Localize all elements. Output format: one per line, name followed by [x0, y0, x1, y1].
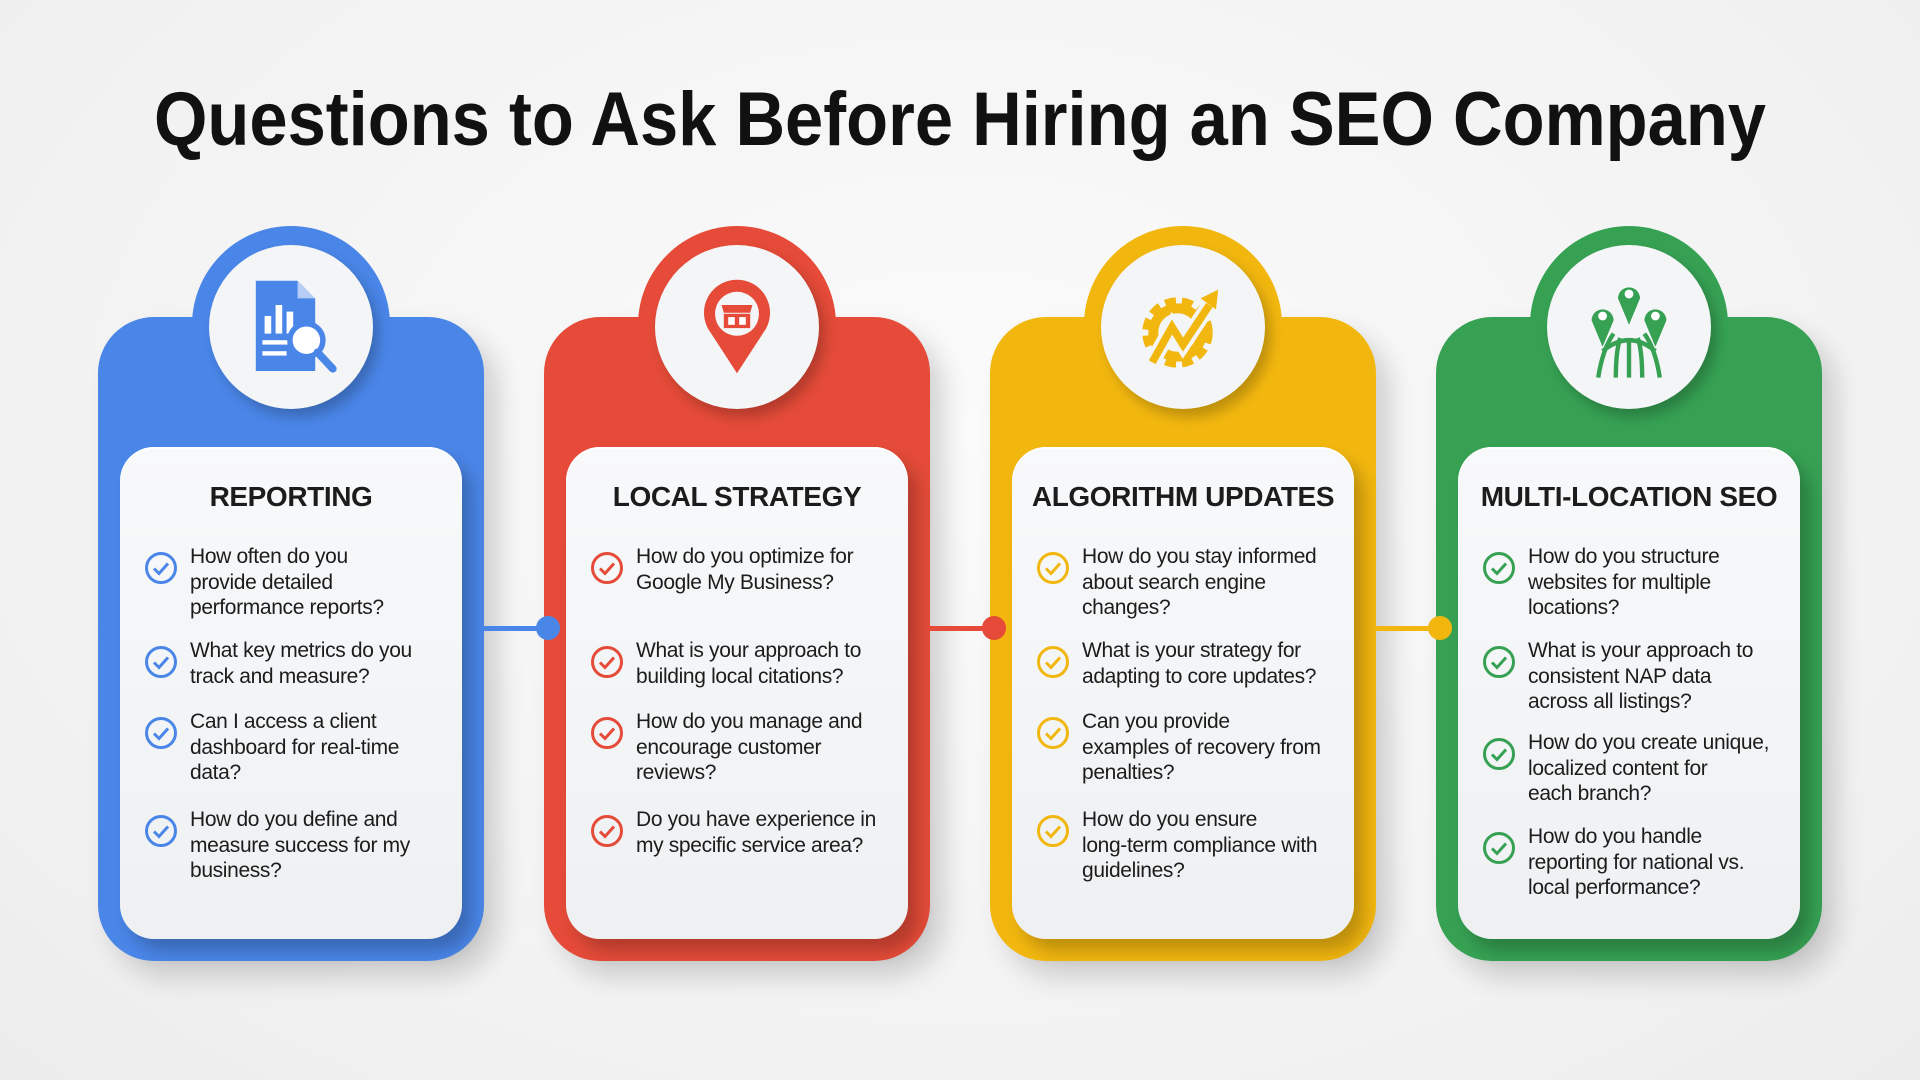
item [1037, 639, 1316, 688]
icon: gear with trend arrow [1101, 245, 1265, 409]
panel: algorithm updates: long-term compliance with [1082, 834, 1317, 857]
item: What is your strategy for [1082, 639, 1301, 662]
panel: reporting: track and measure? [190, 665, 369, 688]
icon: report with magnifier [209, 245, 373, 409]
item [1037, 545, 1316, 619]
item: What key metrics do you [190, 639, 412, 662]
item [591, 710, 862, 784]
item: How often do you [190, 545, 348, 568]
heading: ALGORITHM UPDATES [1032, 481, 1334, 512]
item: Do you have experience in [636, 808, 876, 831]
panel: local strategy: Google My Business? [636, 571, 834, 594]
panel: algorithm updates: examples of recovery from [1082, 736, 1321, 759]
item: How do you stay informed [1082, 545, 1316, 568]
item: What is your approach to [636, 639, 861, 662]
panel: algorithm updates: penalties? [1082, 761, 1174, 784]
heading: REPORTING [210, 481, 372, 512]
icon: globe with pins [1547, 245, 1711, 409]
heading: LOCAL STRATEGY [613, 481, 861, 512]
item [591, 639, 861, 688]
panel: multi-location seo: reporting for national vs. [1528, 851, 1744, 874]
item [591, 545, 854, 594]
icon: map pin with store [655, 245, 819, 409]
panel: local strategy: encourage customer [636, 736, 821, 759]
panel: multi-location seo: locations? [1528, 596, 1619, 619]
panel: reporting [98, 226, 508, 987]
panel: algorithm updates: adapting to core updates? [1082, 665, 1316, 688]
panel: local strategy: building local citations? [636, 665, 843, 688]
item [145, 808, 410, 882]
panel: algorithm updates: guidelines? [1082, 859, 1184, 882]
connector: blue to red [484, 616, 560, 640]
panel: multi-location seo: localized content for [1528, 757, 1707, 780]
panel: reporting: measure success for my [190, 834, 410, 857]
panel: multi-location seo [1436, 226, 1846, 987]
item: What is your approach to [1528, 639, 1753, 662]
panel: multi-location seo: each branch? [1528, 782, 1651, 805]
panel: reporting: dashboard for real-time [190, 736, 399, 759]
item [1037, 710, 1321, 784]
panel: algorithm updates: about search engine [1082, 571, 1266, 594]
item: How do you manage and [636, 710, 862, 733]
panel: algorithm updates: changes? [1082, 596, 1170, 619]
item: How do you structure [1528, 545, 1719, 568]
item: Can I access a client [190, 710, 376, 733]
item: How do you optimize for [636, 545, 853, 568]
item [1483, 545, 1719, 619]
panel: local strategy: reviews? [636, 761, 716, 784]
item: How do you handle [1528, 825, 1702, 848]
panel: local strategy: my specific service area? [636, 834, 863, 857]
item [1483, 639, 1753, 713]
panel: reporting: performance reports? [190, 596, 384, 619]
panel: local strategy [544, 226, 954, 987]
panel: multi-location seo: across all listings? [1528, 690, 1691, 713]
item [1037, 808, 1317, 882]
connector: red to yellow [930, 616, 1006, 640]
item [145, 710, 399, 784]
item [145, 545, 384, 619]
item [1483, 825, 1744, 899]
item [591, 808, 876, 857]
item: How do you ensure [1082, 808, 1257, 831]
panel: multi-location seo: consistent NAP data [1528, 665, 1711, 688]
heading: MULTI-LOCATION SEO [1481, 481, 1777, 512]
item [1483, 731, 1769, 805]
item: How do you create unique, [1528, 731, 1769, 754]
panel: multi-location seo: local performance? [1528, 876, 1700, 899]
panel: multi-location seo: websites for multiple [1528, 571, 1711, 594]
item: Can you provide [1082, 710, 1230, 733]
panel: reporting: data? [190, 761, 241, 784]
panel: algorithm updates [990, 226, 1400, 987]
item: How do you define and [190, 808, 397, 831]
panel: reporting: provide detailed [190, 571, 333, 594]
item [145, 639, 412, 688]
panel: reporting: business? [190, 859, 281, 882]
connector: yellow to green [1376, 616, 1452, 640]
title: Questions to Ask Before Hiring an SEO Company [154, 77, 1766, 162]
